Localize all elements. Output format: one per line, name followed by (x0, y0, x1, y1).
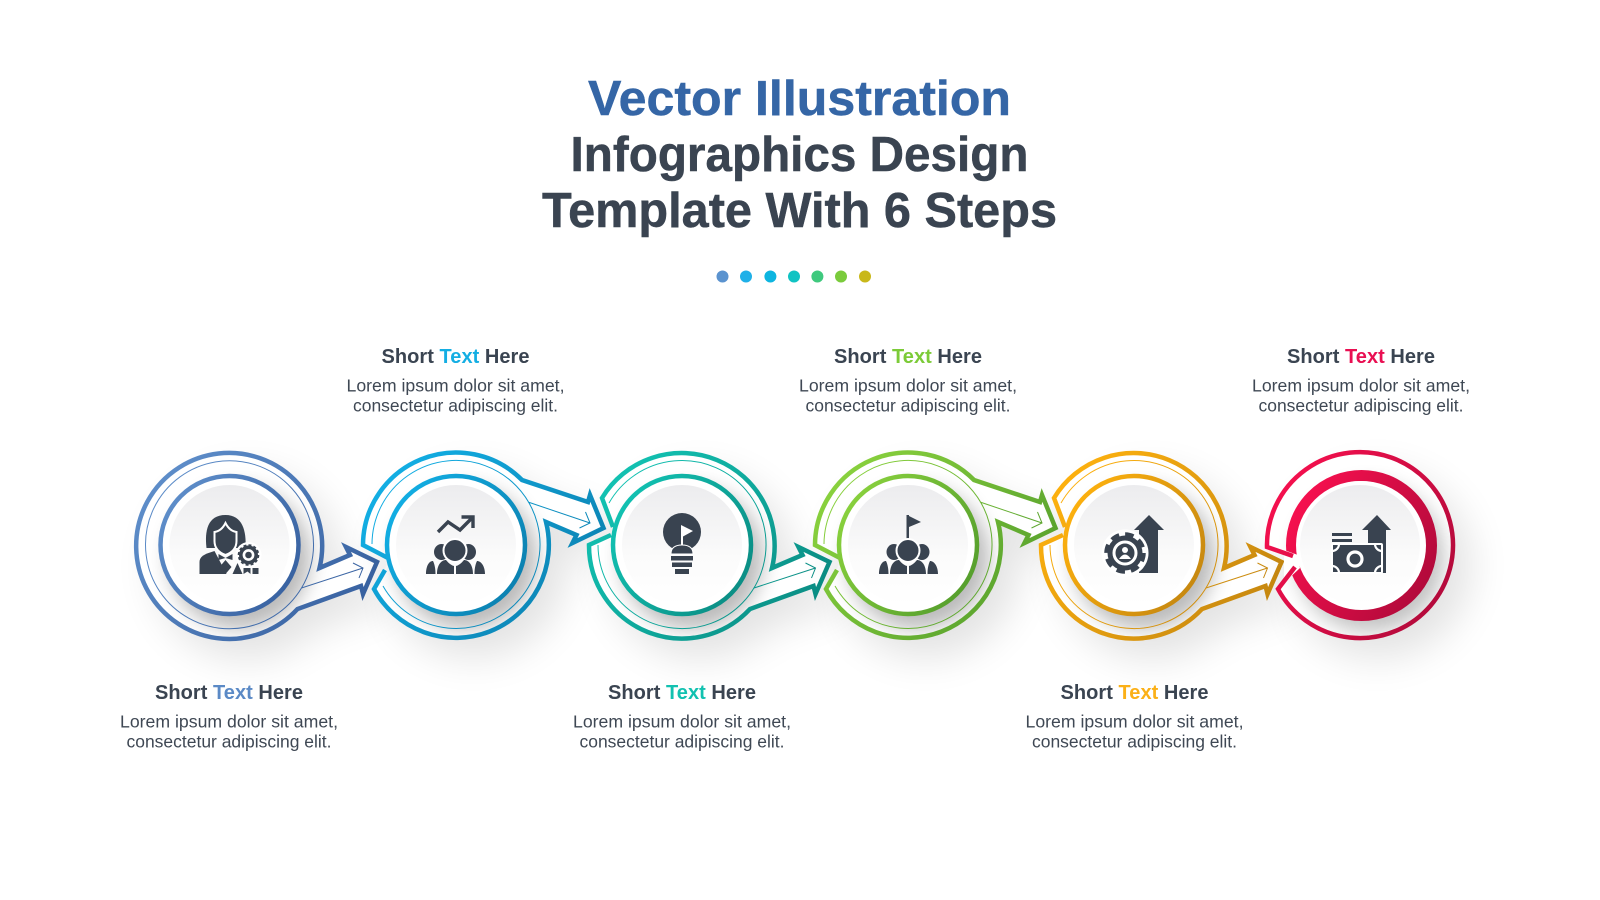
text: step 5 label: Short Text Here (1060, 682, 1208, 704)
text: step 2 label (346, 346, 564, 416)
text: step 6 label: consectetur adipiscing elit. (1258, 396, 1464, 416)
text: step 1 label: Short Text Here (155, 682, 303, 704)
icon: banknote with up arrow (1332, 515, 1391, 573)
icon: gear with person and up arrow (1102, 515, 1164, 576)
text: step 3 label: Short Text Here (608, 682, 756, 704)
text: step 3 label: consectetur adipiscing elit. (580, 732, 784, 752)
text: step 5 label: consectetur adipiscing elit. (1032, 732, 1237, 752)
text: step 4 label: consectetur adipiscing elit. (806, 396, 1010, 416)
step 4 graphic: green ring with arrow (815, 453, 1074, 658)
title: Template With 6 Steps (542, 183, 1057, 238)
text: step 3 label: Lorem ipsum dolor sit amet, (573, 712, 791, 732)
step 1 graphic: blue ring with arrow (136, 453, 395, 659)
text: step 1 label: Lorem ipsum dolor sit amet, (120, 712, 338, 732)
icon: light bulb with flag (663, 513, 701, 574)
text: step 2 label: Short Text Here (382, 346, 530, 368)
text: step 6 label: Short Text Here (1287, 346, 1435, 368)
step 5 graphic: amber ring with arrow (1041, 453, 1300, 659)
text: step 4 label: Lorem ipsum dolor sit amet, (799, 376, 1017, 396)
text: step 5 label (1026, 682, 1244, 752)
text: step 6 label (1252, 346, 1470, 416)
text: step 5 label: Lorem ipsum dolor sit amet, (1026, 712, 1244, 732)
seven coloured title dots (716, 270, 871, 282)
text: step 1 label: consectetur adipiscing elit. (126, 732, 332, 752)
text: step 1 label (120, 682, 338, 752)
title: Vector Illustration (588, 71, 1011, 126)
text: step 6 label: Lorem ipsum dolor sit amet, (1252, 376, 1470, 396)
step 6 graphic: crimson ring (1267, 452, 1471, 658)
icon: businesswoman with badge (200, 515, 262, 574)
text: step 2 label: consectetur adipiscing elit. (353, 396, 558, 416)
title (542, 71, 1057, 238)
text: step 2 label: Lorem ipsum dolor sit amet, (346, 376, 564, 396)
icon: team with growth arrow (426, 517, 485, 574)
text: step 3 label (573, 682, 791, 752)
step 2 graphic: cyan ring with arrow (363, 453, 622, 658)
text: step 4 label: Short Text Here (834, 346, 982, 368)
text: step 4 label (799, 346, 1017, 416)
icon: team with flag (879, 515, 938, 574)
title: Infographics Design (570, 127, 1028, 182)
step 3 graphic: teal ring with arrow (589, 453, 848, 659)
